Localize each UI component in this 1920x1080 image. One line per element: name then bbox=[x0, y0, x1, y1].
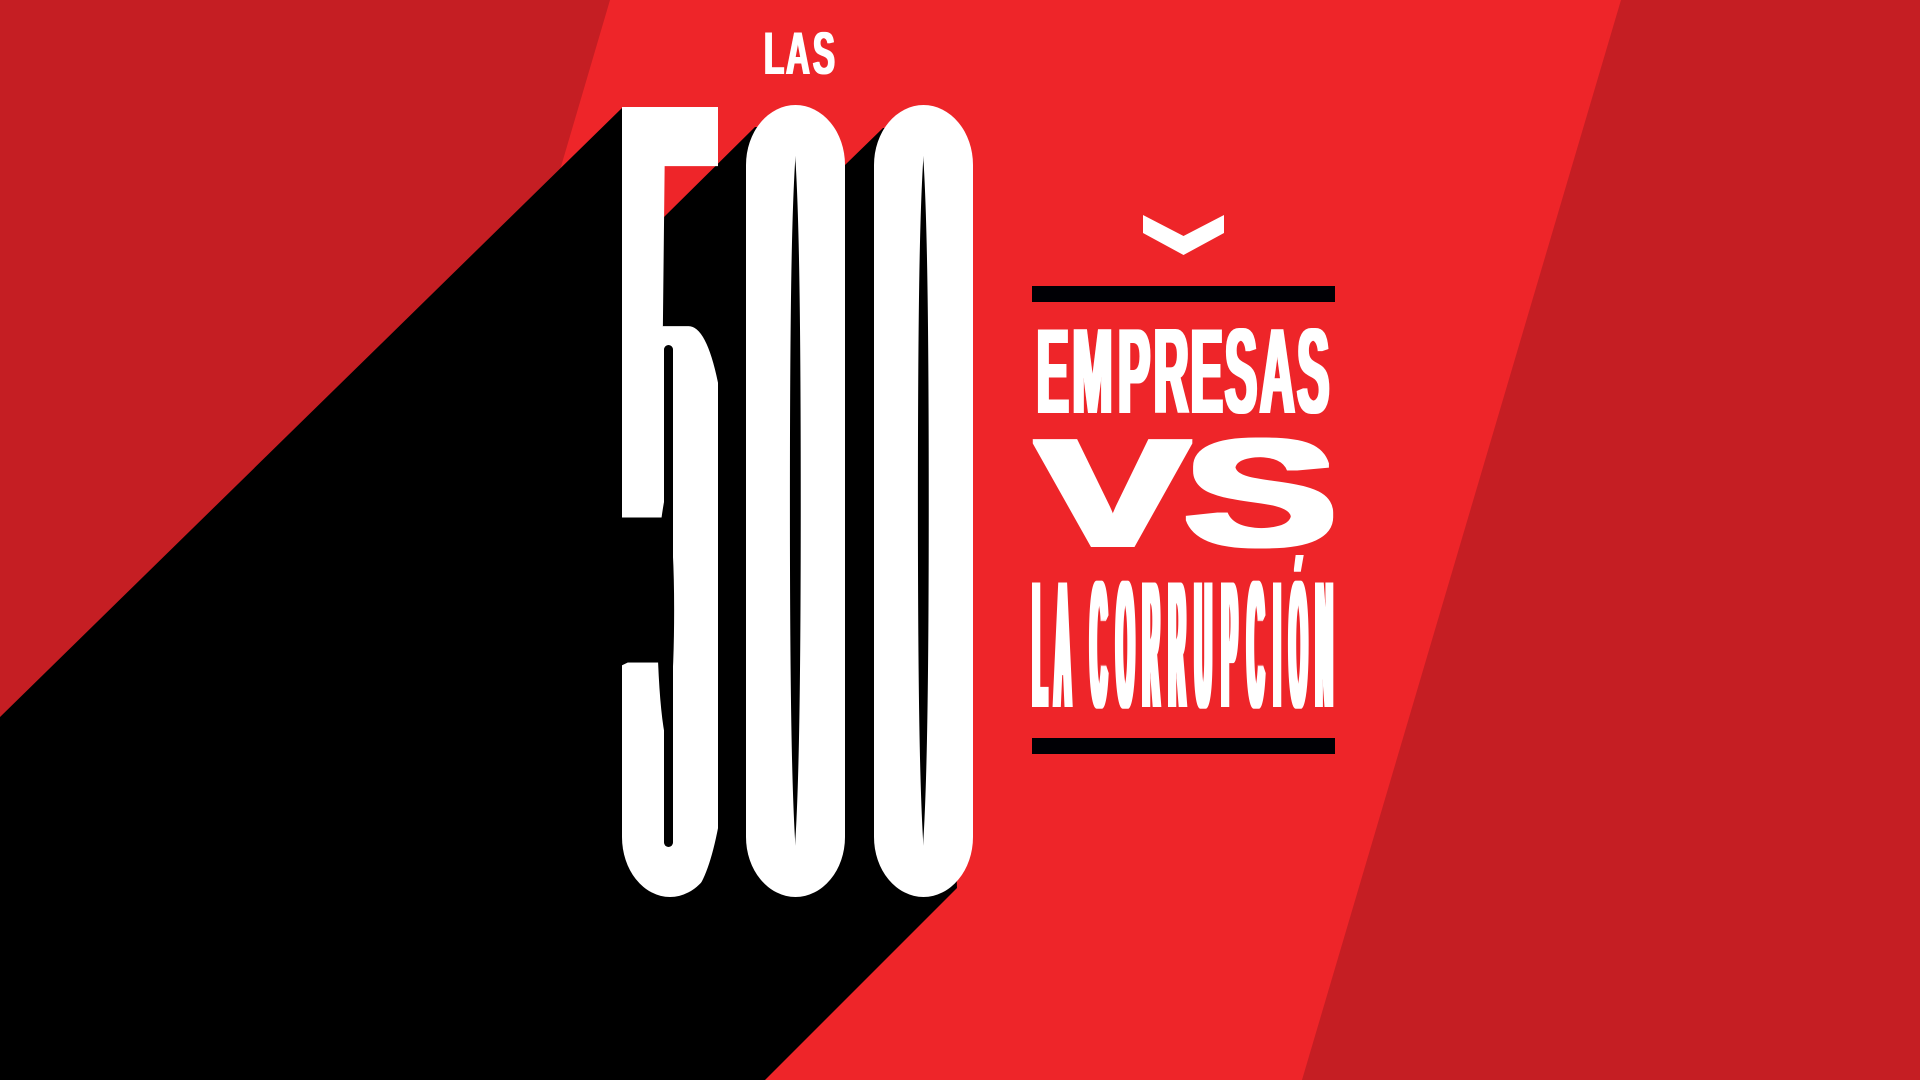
big number: 500 bbox=[622, 105, 973, 897]
heading: LA CORRUPCIÓN: LA CORRUPCIÓN bbox=[1033, 544, 1332, 746]
heading: VS: VS bbox=[1036, 409, 1337, 578]
icon: chevron pointing down bbox=[1143, 215, 1224, 255]
heading: EMPRESAS: EMPRESAS bbox=[1037, 302, 1329, 439]
counter slot of the digit 5 bbox=[664, 345, 673, 847]
long black shadow of the number bbox=[0, 107, 957, 1080]
bottom black rule bbox=[1032, 738, 1335, 754]
top black rule bbox=[1032, 286, 1335, 302]
heading: LAS: LAS bbox=[764, 21, 835, 88]
background: dark red left band bbox=[0, 0, 610, 717]
background: dark red right band bbox=[1302, 0, 1920, 1080]
